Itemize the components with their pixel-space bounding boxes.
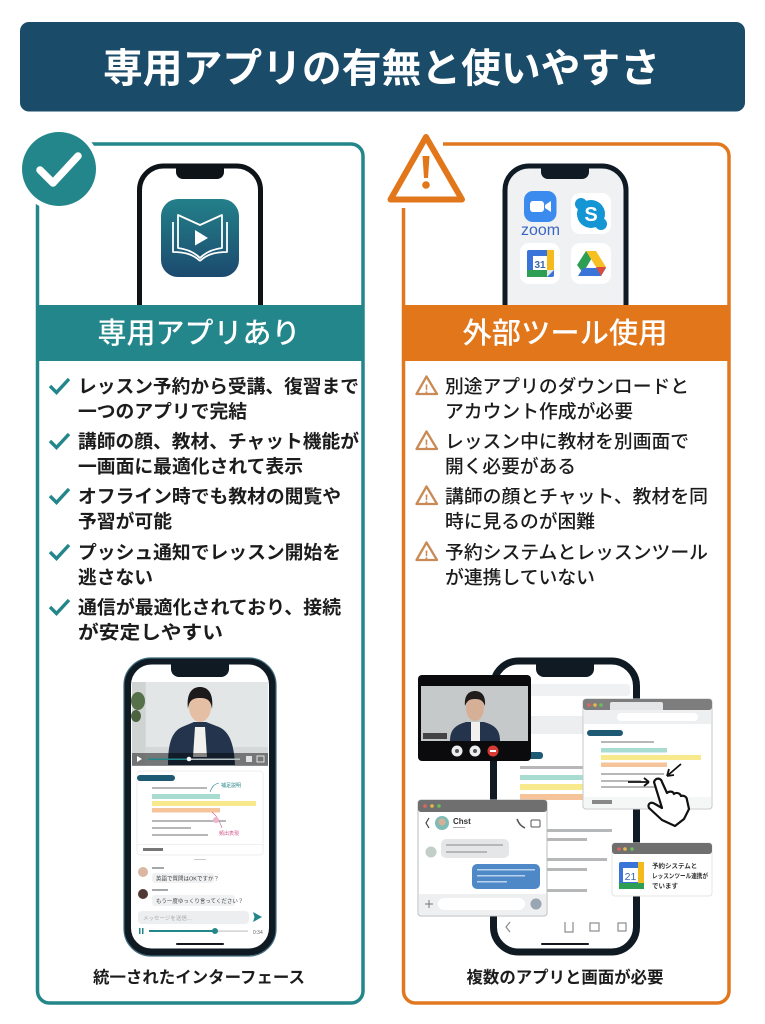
issues list: レッスン中に教材を別画面で bbox=[445, 431, 689, 452]
title: 専用アプリの有無と使いやすさ bbox=[103, 47, 660, 91]
benefits list bbox=[50, 376, 359, 643]
issues list: が連携していない bbox=[445, 567, 595, 588]
band: external tools heading bbox=[402, 305, 730, 361]
panel: dedicated app bbox=[17, 127, 364, 1003]
benefits list: 一つのアプリで完結 bbox=[78, 401, 247, 422]
window: calendar notice: 21 bbox=[625, 871, 636, 883]
icon: calendar bbox=[520, 243, 560, 284]
icon: calendar: 31 bbox=[534, 260, 546, 271]
icon: book with play button bbox=[161, 199, 239, 277]
icon: drive bbox=[571, 243, 611, 284]
issues list: ! bbox=[424, 492, 428, 506]
chat messages: 英語で質問はOKですか？ bbox=[156, 874, 219, 882]
message input and audio bar: メッセージを送信… bbox=[143, 914, 192, 922]
band: dedicated app heading: 専用アプリあり bbox=[98, 317, 300, 350]
issues list: ! bbox=[424, 548, 428, 562]
issues list: 予約システムとレッスンツール bbox=[445, 542, 708, 563]
issues list bbox=[416, 376, 708, 588]
benefits list: 一画面に最適化されて表示 bbox=[78, 456, 303, 477]
window: calendar notice: レッスンツール連携が bbox=[652, 871, 708, 880]
title banner bbox=[20, 22, 745, 112]
benefits list: 予習が可能 bbox=[78, 511, 172, 532]
chat messages: もう一度ゆっくり言ってください？ bbox=[156, 897, 243, 905]
lesson material card bbox=[137, 771, 263, 855]
benefits list: 通信が最適化されており、接続 bbox=[78, 597, 341, 618]
chat messages bbox=[138, 867, 243, 906]
icon: zoom bbox=[521, 191, 560, 239]
benefits list: プッシュ通知でレッスン開始を bbox=[78, 542, 341, 563]
window: chat bbox=[418, 800, 547, 916]
issues list: ! bbox=[424, 437, 428, 451]
issues list: 講師の顔とチャット、教材を同 bbox=[445, 486, 708, 507]
lesson material card: 補足説明 bbox=[221, 782, 241, 789]
icon: zoom: zoom bbox=[521, 222, 560, 239]
window: calendar notice bbox=[612, 843, 712, 896]
phone: unified interface bbox=[124, 658, 276, 956]
phone: multiple screens bbox=[494, 661, 636, 952]
phone: tool icons bbox=[505, 166, 626, 312]
badge: check mark bbox=[17, 127, 101, 211]
band: dedicated app heading bbox=[36, 305, 364, 361]
benefits list: 逃さない bbox=[78, 567, 153, 588]
window: calendar notice: 予約システムと bbox=[652, 861, 697, 870]
phone: app icon bbox=[140, 166, 260, 312]
issues list: 開く必要がある bbox=[445, 456, 576, 477]
window: browser materials bbox=[583, 699, 712, 809]
video lecture bbox=[131, 682, 268, 766]
benefits list: オフライン時でも教材の閲覧や bbox=[78, 486, 341, 507]
message input and audio bar: 0:34 bbox=[253, 930, 263, 936]
window: chat: Chst bbox=[453, 817, 471, 826]
benefits list: レッスン予約から受講、復習まで bbox=[78, 376, 359, 397]
caption: 複数のアプリと画面が必要 bbox=[466, 968, 664, 987]
issues list: 時に見るのが困難 bbox=[445, 511, 595, 532]
arrows and pointing hand bbox=[628, 764, 689, 826]
band: external tools heading: 外部ツール使用 bbox=[462, 317, 668, 350]
lesson material card: 頻出表現 bbox=[219, 830, 239, 837]
benefits list: が安定しやすい bbox=[78, 622, 223, 643]
message input and audio bar bbox=[138, 911, 263, 936]
caption: 統一されたインターフェース bbox=[93, 969, 305, 987]
window: calendar notice: でいます bbox=[652, 882, 678, 890]
badge: warning triangle bbox=[385, 128, 462, 208]
issues list: ! bbox=[424, 382, 428, 396]
icon: skype bbox=[571, 193, 611, 234]
icon: skype: S bbox=[584, 204, 598, 226]
issues list: アカウント作成が必要 bbox=[445, 401, 633, 422]
benefits list: 講師の顔、教材、チャット機能が bbox=[78, 431, 359, 452]
panel: external tools bbox=[385, 128, 730, 1003]
issues list: 別途アプリのダウンロードと bbox=[445, 376, 689, 397]
window: video call bbox=[418, 675, 531, 761]
